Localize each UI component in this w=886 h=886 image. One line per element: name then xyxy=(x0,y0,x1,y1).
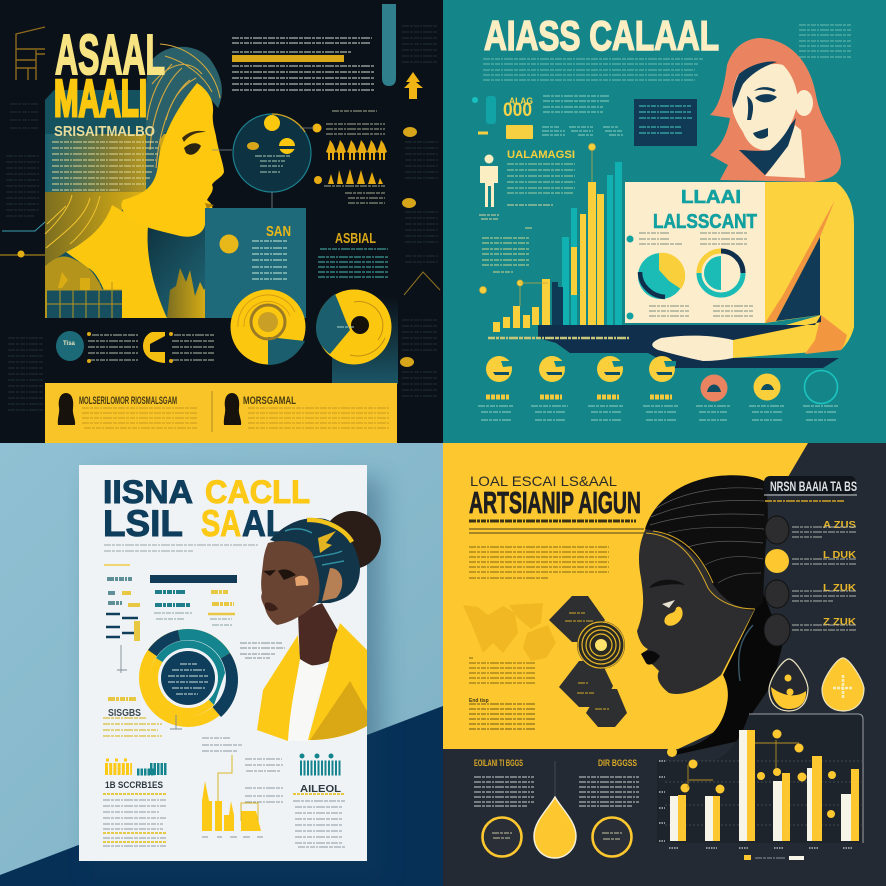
white shirt xyxy=(288,659,329,741)
title CACLL: CACLL xyxy=(205,474,310,510)
upper hair xyxy=(146,47,222,192)
navy label bar xyxy=(150,575,237,583)
bar chart xyxy=(493,162,622,332)
teal pill xyxy=(382,4,396,86)
chart axis labels xyxy=(659,761,853,848)
arm shadow navy xyxy=(776,237,820,321)
yellow face profile xyxy=(121,83,224,237)
pie chart left xyxy=(638,253,685,299)
people pictogram rows xyxy=(314,140,387,184)
barcode chart xyxy=(300,760,341,776)
hair strands xyxy=(650,488,764,583)
screen title 2: LALSSCANT xyxy=(653,211,757,233)
panel: light blue poster on paper xyxy=(0,443,443,886)
title LSIL: LSIL xyxy=(103,503,183,544)
side dim text xyxy=(6,26,438,410)
yellow footer band xyxy=(45,383,397,443)
body left xyxy=(45,256,115,318)
teardrop yellow xyxy=(822,658,864,711)
chart grid xyxy=(665,761,863,825)
gold hair strands xyxy=(646,531,755,609)
portrait face xyxy=(261,541,320,625)
icon grid xyxy=(154,592,235,625)
barcode text xyxy=(293,793,345,795)
mini annotation xyxy=(240,643,285,658)
neck and shoulder xyxy=(66,205,167,318)
face xyxy=(732,64,798,150)
ring target xyxy=(577,621,625,669)
stat lines xyxy=(543,96,609,112)
eye and brow xyxy=(182,131,206,155)
footer divider xyxy=(211,391,213,432)
panel: yellow and dark poster with black profile xyxy=(443,443,886,886)
panel: dark poster with yellow profile xyxy=(0,0,443,443)
yellow field xyxy=(443,443,808,749)
list labels xyxy=(823,520,857,628)
city and bar motif xyxy=(47,272,122,318)
legend xyxy=(744,855,804,860)
navy info box xyxy=(634,99,697,146)
teal yellow ring chart xyxy=(316,290,392,364)
ear xyxy=(795,90,813,116)
donut chart right xyxy=(695,247,747,299)
neck and shoulder black xyxy=(675,593,783,755)
headband xyxy=(307,520,352,542)
right column lines xyxy=(318,249,388,277)
title IISNA: IISNA xyxy=(103,474,193,510)
neck shadow xyxy=(739,118,796,175)
box heading: SAN xyxy=(266,223,291,240)
title subline xyxy=(469,520,636,522)
footer silhouette left xyxy=(58,393,75,425)
stat lines xyxy=(103,718,162,736)
lips xyxy=(641,651,660,665)
neck stroke xyxy=(739,625,753,681)
sweater orange band xyxy=(765,200,835,323)
jacket left xyxy=(257,635,300,741)
wireframe building icon xyxy=(16,27,45,80)
double rule xyxy=(469,529,644,533)
donut chart xyxy=(139,629,238,727)
small label row xyxy=(542,127,623,135)
list text lines xyxy=(792,527,856,630)
teardrop outline xyxy=(769,659,808,711)
laptop base xyxy=(538,315,839,368)
drop with stem xyxy=(534,761,576,858)
heading subline xyxy=(765,500,845,502)
gold text backdrop xyxy=(45,134,172,192)
bottom left heading: 1B SCCRB1ES xyxy=(105,780,163,790)
ring right xyxy=(592,818,632,856)
left body text xyxy=(469,658,536,683)
lower text left xyxy=(88,335,138,360)
ring left xyxy=(482,818,522,856)
lower text right xyxy=(172,335,214,360)
heading ASAAL: ASAAL xyxy=(55,23,165,87)
dotted world map xyxy=(463,603,556,661)
person icon xyxy=(480,154,498,207)
thin pointer xyxy=(117,645,182,729)
icon row yellow xyxy=(486,356,838,404)
bar chart xyxy=(670,730,859,841)
barcode dots xyxy=(300,754,334,758)
small oval icon xyxy=(220,234,238,254)
hair sweep line xyxy=(732,62,777,108)
list labels: L ZUK xyxy=(823,583,857,594)
neck xyxy=(765,125,805,178)
bottom left chart xyxy=(105,760,167,772)
gold spikes chart xyxy=(167,268,217,318)
footer heading right: MORSGAMAL xyxy=(243,395,296,407)
round label text: Tisa xyxy=(63,341,76,347)
footer text xyxy=(82,408,389,428)
chart frame xyxy=(749,714,863,843)
intro lines xyxy=(483,59,703,80)
hex captions xyxy=(565,613,609,709)
woman hair xyxy=(710,38,841,182)
hair highlights xyxy=(318,531,336,553)
sweater xyxy=(733,182,854,358)
screen text xyxy=(639,233,753,316)
circular diagram xyxy=(212,114,322,215)
stat heading: SISGBS xyxy=(108,708,141,719)
teal round label xyxy=(56,331,84,361)
face features xyxy=(747,87,777,139)
list labels: A ZUS xyxy=(823,520,856,531)
paper xyxy=(79,465,367,861)
heading MAALI: MAALI xyxy=(54,70,147,128)
footer silhouette right xyxy=(224,393,241,425)
bottom left text xyxy=(103,794,166,842)
sleeve orange xyxy=(805,315,847,354)
list labels: Z ZUK xyxy=(823,617,857,628)
heading rule xyxy=(764,494,857,496)
footer heading left: MOLSERILOMOR RIOSMALSGAM xyxy=(79,395,177,407)
icon captions xyxy=(478,406,839,420)
right heading pill xyxy=(764,476,856,494)
portrait neck xyxy=(298,603,345,666)
top text block xyxy=(232,38,374,90)
top text xyxy=(469,547,609,578)
yellow bullets xyxy=(87,332,173,363)
teal and yellow connector lines xyxy=(2,222,45,231)
screen title 1: LLAAI xyxy=(681,187,741,207)
right list badges xyxy=(764,516,790,646)
lower hair xyxy=(138,226,217,318)
top left stat icons xyxy=(472,96,533,124)
teardrop inner xyxy=(771,674,806,709)
donut centre text xyxy=(168,664,208,694)
main title: ARTSIANIP AIGUN xyxy=(469,485,641,520)
right mini text xyxy=(324,111,385,203)
small section xyxy=(469,704,536,729)
small chart captions xyxy=(104,565,140,641)
eyebrow xyxy=(649,580,685,588)
chart background xyxy=(657,714,863,843)
right column heading: ASBIAL xyxy=(335,230,376,247)
hair strands xyxy=(147,44,220,168)
face xyxy=(637,513,763,694)
lower text left xyxy=(474,777,534,806)
portrait bun xyxy=(323,511,381,569)
yellow ring chart xyxy=(230,290,306,365)
jacket shading xyxy=(310,681,367,740)
overlay text lines xyxy=(52,142,158,190)
jacket right xyxy=(308,623,367,740)
hand xyxy=(652,336,733,361)
box text lines xyxy=(252,241,288,279)
icon labels xyxy=(486,394,672,400)
title: AIASS CALAAL xyxy=(484,12,719,59)
title AL: AL xyxy=(242,503,286,544)
portrait hair xyxy=(270,518,360,603)
eye xyxy=(662,600,675,608)
yellow connector badges xyxy=(400,127,417,367)
highlight bar xyxy=(232,55,344,62)
lower left heading: EOILANI TI BGGS xyxy=(474,758,523,768)
top right lines xyxy=(799,25,851,57)
portrait ear xyxy=(322,568,342,601)
coloured stat xyxy=(108,697,136,701)
navy diagonal xyxy=(0,706,443,886)
hexagons xyxy=(549,596,627,727)
top left stat icons: ALAG xyxy=(509,96,533,106)
lower mid heading: DIR BGGSS xyxy=(598,758,637,768)
subtitle lines xyxy=(104,545,258,551)
center chart caption xyxy=(202,738,283,837)
section label: End tisp xyxy=(469,698,489,704)
dark teal lower right box xyxy=(332,296,398,384)
cheek mark xyxy=(664,607,683,626)
left hair wisps xyxy=(45,192,165,266)
chart pins xyxy=(480,144,596,306)
subheading: SRISAITMALBO xyxy=(54,123,155,140)
arrow icon xyxy=(404,72,423,99)
section heading: UALAMAGSI xyxy=(507,149,575,161)
upper title: LOAL ESCAI LS&AAL xyxy=(470,473,617,489)
paper shadow xyxy=(92,479,382,879)
panel: teal poster with laptop xyxy=(443,0,886,443)
list labels: L DUK xyxy=(823,550,857,561)
chart dots xyxy=(667,730,836,818)
portrait panel background xyxy=(45,90,217,318)
teal info box xyxy=(205,208,306,318)
screen bullets xyxy=(626,236,634,320)
teardrop glyph xyxy=(833,675,853,699)
top left stat icons: 000 xyxy=(503,100,532,121)
axis label strip xyxy=(488,337,629,339)
lower text mid xyxy=(579,777,639,806)
face details xyxy=(263,569,308,611)
chart connector xyxy=(688,740,799,788)
chevron line xyxy=(404,272,440,295)
barcode heading: AILEOL xyxy=(300,784,341,795)
yellow c icon xyxy=(143,332,165,363)
center chart xyxy=(202,755,261,831)
navy box text xyxy=(639,106,693,133)
section lines xyxy=(507,164,575,193)
laptop screen xyxy=(625,182,765,323)
mini chart annotations xyxy=(482,228,533,272)
lips xyxy=(205,203,214,209)
hair xyxy=(645,475,768,611)
title SA: SA xyxy=(201,503,241,544)
yellow card xyxy=(506,125,533,139)
